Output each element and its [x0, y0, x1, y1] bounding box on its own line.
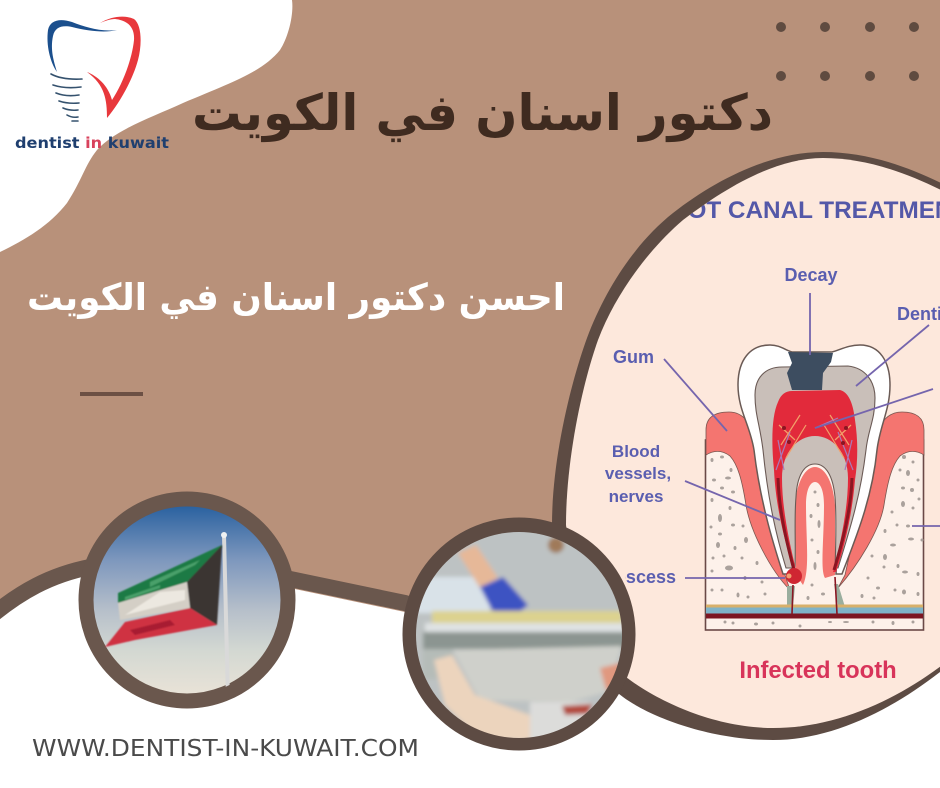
photo: Kuwait flag in circle [86, 499, 288, 701]
flag [105, 545, 222, 647]
bone speckles [710, 455, 924, 628]
label: Decay: Decay [784, 265, 838, 285]
short divider [80, 392, 143, 396]
label: Gum: Gum [613, 347, 654, 367]
label: Infected tooth: Infected tooth [739, 657, 897, 684]
logo [15, 17, 170, 152]
flag pole [222, 535, 230, 700]
dark edge of lower area [0, 567, 520, 640]
white corner blob [0, 0, 292, 252]
label: Blood vessels, nerves: Blood [612, 442, 660, 461]
panel: root canal diagram [552, 152, 940, 740]
logo wordmark: dentist in kuwait [15, 134, 170, 152]
title: دكتور اسنان في الكويت [192, 84, 773, 143]
white lower area [0, 575, 940, 788]
decorative dot grid [776, 22, 919, 81]
leader lines [664, 293, 940, 578]
label: Blood vessels, nerves: nerves [609, 487, 663, 506]
label: Abscess: Abscess [602, 567, 676, 587]
subtitle: احسن دكتور اسنان في الكويت [27, 276, 565, 319]
diagram blob outline [552, 152, 940, 740]
tooth cross-section [706, 345, 924, 630]
diagram blob background [566, 158, 940, 728]
photo: tooth shade guide in circle [410, 525, 630, 745]
label: Blood vessels, nerves: vessels, [605, 464, 671, 483]
website url: WWW.DENTIST-IN-KUWAIT.COM [32, 736, 419, 762]
icon: tooth logo [47, 17, 141, 121]
